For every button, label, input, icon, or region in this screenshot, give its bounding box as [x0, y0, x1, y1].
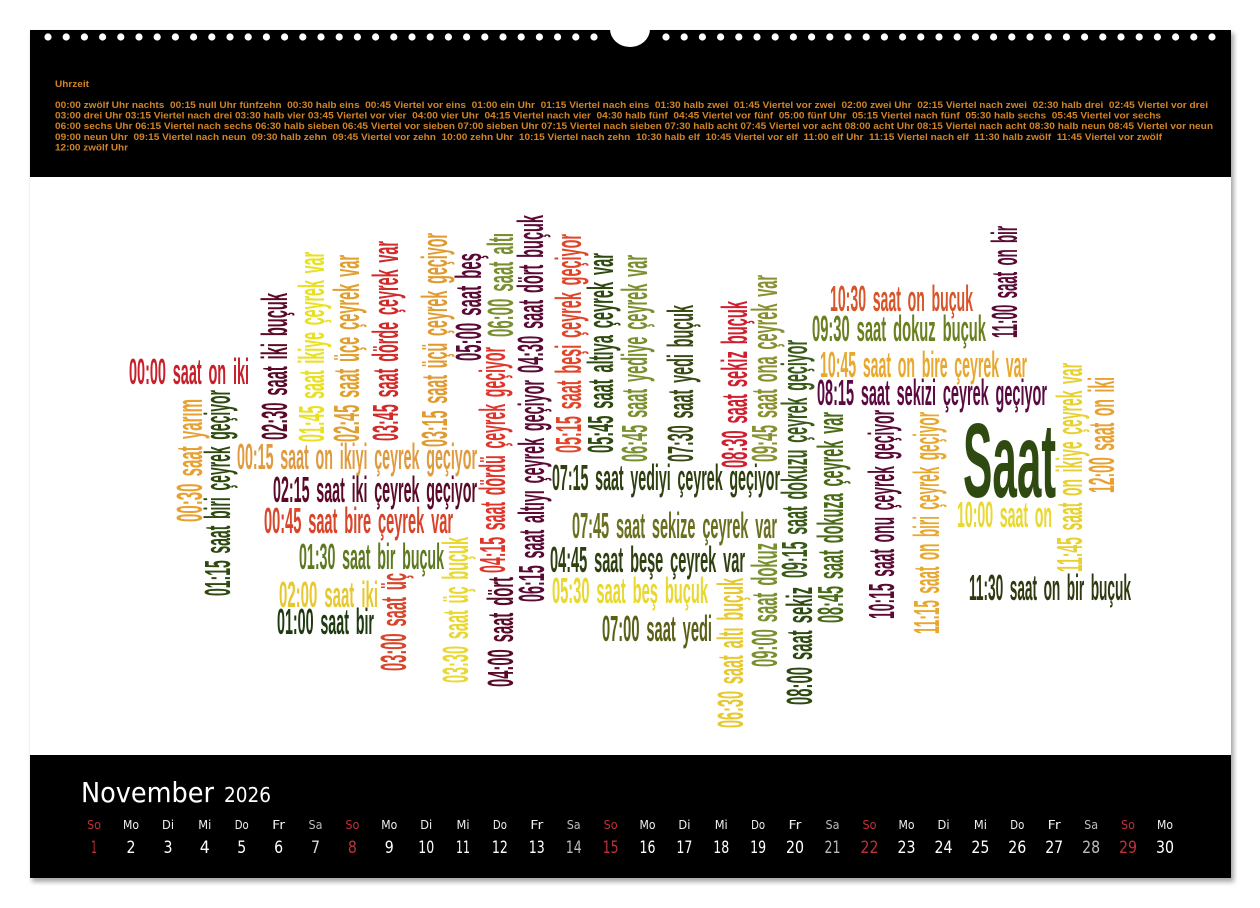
word cloud: 10:15 saat onu çeyrek geçiyor	[861, 410, 902, 619]
date row: 2	[126, 838, 136, 858]
text: 11:00 saat on bir	[984, 226, 1025, 338]
date row: 1	[91, 838, 97, 858]
year: 2026	[224, 783, 271, 807]
weekday row: Sa	[826, 818, 840, 832]
legend line 2: 03:00 drei Uhr 03:15 Viertel nach drei 03:30 halb vier 03:45 Viertel vor vier 04:00 vier Uhr 04:15 Viertel nach vier 04:30 halb fünf 04:45 Viertel vor fünf 05:00 fünf Uhr 05:15 Viertel nach fünf 05:30 halb sechs 05:45 Viertel vor sechs	[55, 110, 1161, 120]
word cloud: 10:30 saat on buçuk	[830, 278, 973, 319]
word cloud: 07:15 saat yediyi çeyrek geçiyor	[552, 457, 780, 498]
weekday row: Do	[235, 818, 249, 832]
weekday row: Di	[420, 818, 432, 832]
legend line 3: 06:00 sechs Uhr 06:15 Viertel nach sechs 06:30 halb sieben 06:45 Viertel vor sieben 07:00 sieben Uhr 07:15 Viertel nach sieben 07:30 halb acht 07:45 Viertel vor acht 08:00 acht Uhr 08:15 Viertel nach acht 08:30 halb neun 08:45 Viertel vor neun	[55, 121, 1213, 131]
date row: 12	[492, 838, 508, 858]
word cloud: 06:15 saat altıyı çeyrek geçiyor	[511, 380, 552, 602]
date row: 9	[385, 838, 394, 858]
word cloud: 00:00 saat on iki	[129, 351, 249, 392]
date row: 30	[1156, 838, 1174, 858]
date row: 28	[1082, 838, 1100, 858]
hanger notch	[610, 29, 650, 47]
word cloud: 04:45 saat beşe çeyrek var	[550, 539, 745, 580]
date row: 15	[603, 838, 619, 858]
weekday row: Mo	[640, 818, 656, 832]
word cloud: 05:30 saat beş buçuk	[552, 570, 708, 611]
month title: November	[81, 776, 214, 809]
weekday row: Fr	[788, 818, 802, 832]
word cloud: 11:45 saat on ikiye çeyrek var	[1049, 363, 1090, 572]
weekday row: Di	[162, 818, 174, 832]
weekday row: Do	[751, 818, 765, 832]
word cloud: 06:30 saat altı buçuk	[710, 578, 751, 728]
word cloud: 02:30 saat iki buçuk	[254, 293, 295, 440]
weekday row: Fr	[272, 818, 285, 832]
weekday row: Mo	[381, 818, 397, 832]
weekday row: Do	[1010, 818, 1024, 832]
date row: 26	[1008, 838, 1026, 858]
weekday row: Mi	[456, 818, 470, 832]
weekday row: Fr	[530, 818, 543, 832]
weekday row: Mi	[974, 818, 987, 832]
date row: 14	[566, 838, 582, 858]
weekday row: Mo	[123, 818, 139, 832]
date row: 16	[640, 838, 656, 858]
word cloud: 01:00 saat bir	[277, 601, 374, 642]
word cloud: 02:00 saat iki	[279, 574, 378, 615]
weekday row: So	[862, 818, 876, 832]
header text: Uhrzeit legend	[55, 79, 1213, 152]
word cloud: 00:30 saat yarım	[169, 399, 210, 522]
weekday row: Mo	[898, 818, 914, 832]
weekday row: Mi	[198, 818, 211, 832]
word cloud: 01:15 saat biri çeyrek geçiyor	[197, 390, 238, 596]
legend line 4: 09:00 neun Uhr 09:15 Viertel nach neun 09:30 halb zehn 09:45 Viertel vor zehn 10:00 zehn Uhr 10:15 Viertel nach zehn 10:30 halb elf 10:45 Viertel vor elf 11:00 elf Uhr 11:15 Viertel nach elf 11:30 halb zwölf 11:45 Viertel vor zwölf	[55, 132, 1163, 142]
weekday row: Di	[938, 818, 950, 832]
weekday row: Do	[493, 818, 507, 832]
word cloud	[129, 215, 1131, 728]
date row: 10	[418, 838, 434, 858]
date row: 27	[1045, 838, 1063, 858]
date row	[91, 838, 1174, 858]
date row: 13	[529, 838, 545, 858]
weekday row	[87, 818, 1173, 832]
date row: 18	[713, 838, 729, 858]
date row: 6	[274, 838, 283, 858]
word cloud: Saat	[963, 402, 1056, 520]
word cloud: 08:45 saat dokuza çeyrek var	[810, 412, 851, 623]
word cloud: 09:30 saat dokuz buçuk	[812, 308, 986, 349]
date row: 7	[311, 838, 320, 858]
word cloud: 01:30 saat bir buçuk	[299, 536, 444, 577]
word cloud: 10:00 saat on	[957, 494, 1052, 535]
legend line 1: 00:00 zwölf Uhr nachts 00:15 null Uhr fünfzehn 00:30 halb eins 00:45 Viertel vor eins 01:00 ein Uhr 01:15 Viertel nach eins 01:30 halb zwei 01:45 Viertel vor zwei 02:00 zwei Uhr 02:15 Viertel nach zwei 02:30 halb drei 02:45 Viertel vor drei	[55, 100, 1208, 110]
word cloud: 02:15 saat iki çeyrek geçiyor	[273, 469, 477, 510]
word cloud: 09:00 saat dokuz	[744, 543, 785, 667]
date row: 19	[750, 838, 766, 858]
text: 06:00 saat altı	[480, 233, 521, 337]
word cloud: 08:00 saat sekiz	[779, 587, 820, 705]
word cloud: 03:30 saat üç buçuk	[435, 537, 476, 683]
legend title: Uhrzeit	[55, 79, 89, 89]
date row: 24	[934, 838, 952, 858]
date row: 11	[456, 838, 470, 858]
word cloud: 05:00 saat beş	[448, 253, 489, 361]
word cloud: 07:45 saat sekize çeyrek var	[572, 505, 777, 546]
word cloud: 12:00 saat on iki	[1081, 377, 1122, 493]
word cloud: 07:30 saat yedi buçuk	[660, 305, 701, 462]
word cloud: 11:15 saat on biri çeyrek geçiyor	[906, 412, 947, 634]
weekday row: So	[345, 818, 359, 832]
word cloud: 07:00 saat yedi	[602, 608, 712, 649]
weekday row: Sa	[567, 818, 581, 832]
word cloud: 08:30 saat sekiz buçuk	[714, 301, 755, 468]
header band	[30, 29, 1231, 177]
calendar band	[30, 755, 1231, 878]
weekday row: So	[604, 818, 618, 832]
weekday row: So	[87, 818, 101, 832]
weekday row: Mo	[1157, 818, 1173, 832]
date row: 29	[1119, 838, 1137, 858]
word cloud: 04:00 saat dört	[480, 577, 521, 687]
binding holes	[44, 33, 1216, 41]
weekday row: Sa	[1084, 818, 1098, 832]
date row: 5	[237, 838, 246, 858]
word cloud: 04:15 saat dördü çeyrek geçiyor	[472, 347, 513, 573]
date row: 3	[164, 838, 172, 858]
date row: 23	[898, 838, 916, 858]
word cloud: 00:45 saat bire çeyrek var	[264, 500, 453, 541]
legend line 5: 12:00 zwölf Uhr	[55, 142, 129, 152]
weekday row: Fr	[1048, 818, 1061, 832]
date row: 4	[200, 838, 210, 858]
date row: 17	[676, 838, 692, 858]
word cloud: 03:00 saat üç	[373, 573, 414, 671]
weekday row: Sa	[308, 818, 322, 832]
word cloud: 00:15 saat on ikiyi çeyrek geçiyor	[237, 436, 477, 477]
date row: 20	[786, 838, 804, 858]
weekday row: So	[1121, 818, 1135, 832]
weekday row: Mi	[715, 818, 728, 832]
date row: 22	[860, 838, 878, 858]
date row: 8	[348, 838, 357, 858]
date row: 21	[824, 838, 840, 858]
word cloud: 09:45 saat ona çeyrek var	[744, 275, 785, 462]
date row: 25	[971, 838, 989, 858]
weekday row: Di	[678, 818, 690, 832]
